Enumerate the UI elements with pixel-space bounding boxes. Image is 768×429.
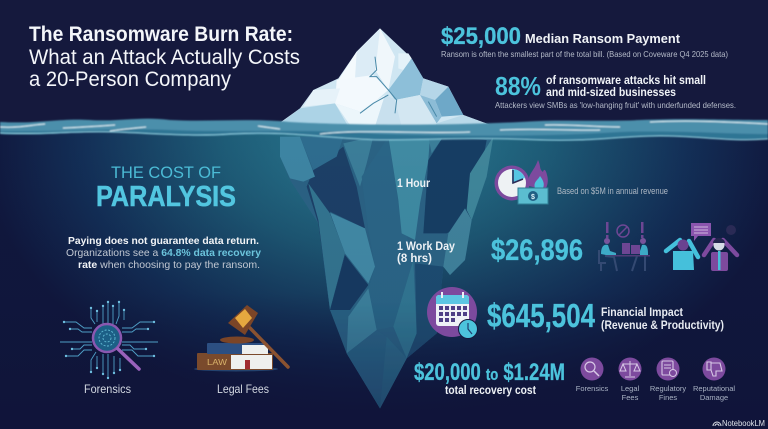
icon: thumbs down xyxy=(702,358,726,380)
icon: regulatory fines xyxy=(656,358,680,380)
iceberg above water xyxy=(277,28,493,130)
icon labels xyxy=(576,384,735,402)
background: night sky xyxy=(0,0,768,130)
iceberg cracks xyxy=(360,57,437,117)
text block: data recovery: Paying does not guarantee data return. xyxy=(68,235,259,247)
icon labels: Fines xyxy=(659,393,677,402)
label: 1 work day: (8 hrs) xyxy=(397,253,432,265)
title: a 20-Person Company xyxy=(29,68,231,91)
stat: 88 percent of attacks: of ransomware attacks hit small xyxy=(546,73,706,87)
icon: legal scales xyxy=(618,358,642,380)
background: deep sea xyxy=(0,128,768,429)
icon labels: Regulatory xyxy=(650,384,686,393)
icon: calendar with clock xyxy=(427,287,478,338)
icon: clock and burning money: $ xyxy=(531,194,535,201)
label: legal fees: Legal Fees xyxy=(217,382,269,396)
heading: the cost of paralysis xyxy=(96,163,236,213)
label: financial impact: Financial Impact xyxy=(601,307,683,319)
note: based on 5M revenue: Based on $5M in annual revenue xyxy=(557,186,668,196)
label: 1 work day: 1 Work Day xyxy=(397,241,456,253)
stat: median ransom payment: Median Ransom Payment xyxy=(525,31,681,46)
icon row: recovery cost items xyxy=(576,358,735,402)
icon labels: Reputational xyxy=(693,384,735,393)
label: financial impact xyxy=(601,307,724,332)
text block: data recovery: rate when choosing to pay the ransom. xyxy=(78,259,260,271)
heading: the cost of paralysis: THE COST OF xyxy=(111,163,221,182)
icon: clock and burning money xyxy=(494,160,548,204)
label: forensics: Forensics xyxy=(84,382,131,396)
stat: median ransom payment xyxy=(441,23,728,59)
title: What an Attack Actually Costs xyxy=(29,46,300,69)
stat: 26,896: $26,896 xyxy=(491,234,583,267)
text block: data recovery xyxy=(66,235,261,271)
label: 1 hour: 1 Hour xyxy=(397,178,430,190)
label: 1 work day xyxy=(397,241,456,265)
label: financial impact: (Revenue & Productivity) xyxy=(601,320,724,332)
title xyxy=(29,23,300,91)
icon: gavel and law books xyxy=(194,305,288,372)
stat: 645,504: $645,504 xyxy=(487,297,596,334)
text block: data recovery: Organizations see a 64.8% data recovery xyxy=(66,247,261,259)
stat: 88 percent of attacks: 88% xyxy=(495,71,541,101)
stat: total recovery cost: $20,000 to $1.24M xyxy=(414,359,565,386)
icon: forensics circuit magnifier xyxy=(60,301,158,379)
icon labels: Forensics xyxy=(576,384,609,393)
stat: total recovery cost: total recovery cost xyxy=(445,385,536,397)
icon labels: Legal xyxy=(621,384,640,393)
stat: median ransom payment: Ransom is often the smallest part of the total bill. (Based on Coveware Q4 2025 data) xyxy=(441,49,728,59)
iceberg below water xyxy=(280,137,493,408)
stat: median ransom payment: $25,000 xyxy=(441,23,521,50)
icon labels: Damage xyxy=(700,393,728,402)
stat: 88 percent of attacks xyxy=(495,71,736,110)
icon: stressed people xyxy=(666,223,737,271)
icon labels: Fees xyxy=(622,393,639,402)
icon: stalled workers at desk xyxy=(599,222,650,271)
logo: NotebookLM: NotebookLM xyxy=(722,419,765,428)
stat: 88 percent of attacks: Attackers view SMBs as 'low-hanging fruit' with underfunded defenses. xyxy=(495,100,736,110)
stat: total recovery cost xyxy=(414,359,565,397)
icon: forensics xyxy=(580,358,604,380)
heading: the cost of paralysis: PARALYSIS xyxy=(96,181,236,213)
stat: 88 percent of attacks: and mid-sized businesses xyxy=(546,85,676,99)
title: The Ransomware Burn Rate: xyxy=(29,23,293,46)
water surface band xyxy=(0,119,768,140)
icon: gavel and law books: LAW xyxy=(207,358,228,367)
